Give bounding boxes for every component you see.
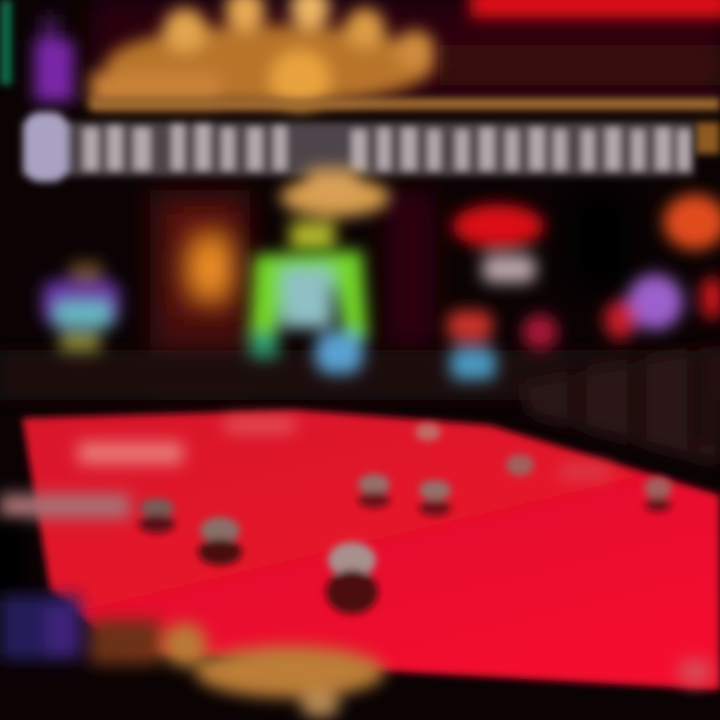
red hat figure — [452, 204, 544, 283]
neon sign: purple — [34, 15, 74, 102]
neon sign: green strip — [0, 0, 12, 85]
chairs: right rail — [520, 345, 720, 465]
bottom foreground glow: gold chandelier reflection — [0, 595, 713, 718]
gold marquee strip — [90, 98, 720, 154]
left dark table edge — [0, 525, 26, 595]
left figure — [42, 262, 120, 352]
red table — [0, 410, 720, 690]
red light bar top right — [470, 0, 720, 18]
lantern — [175, 215, 235, 315]
small figure: centre right — [447, 310, 558, 380]
chips on table — [139, 423, 672, 614]
table markings — [0, 418, 610, 518]
title: blurred silver lettering — [22, 112, 694, 182]
right figures — [604, 194, 720, 340]
sombrero figure: green character — [248, 168, 390, 374]
chandelier — [90, 0, 435, 110]
